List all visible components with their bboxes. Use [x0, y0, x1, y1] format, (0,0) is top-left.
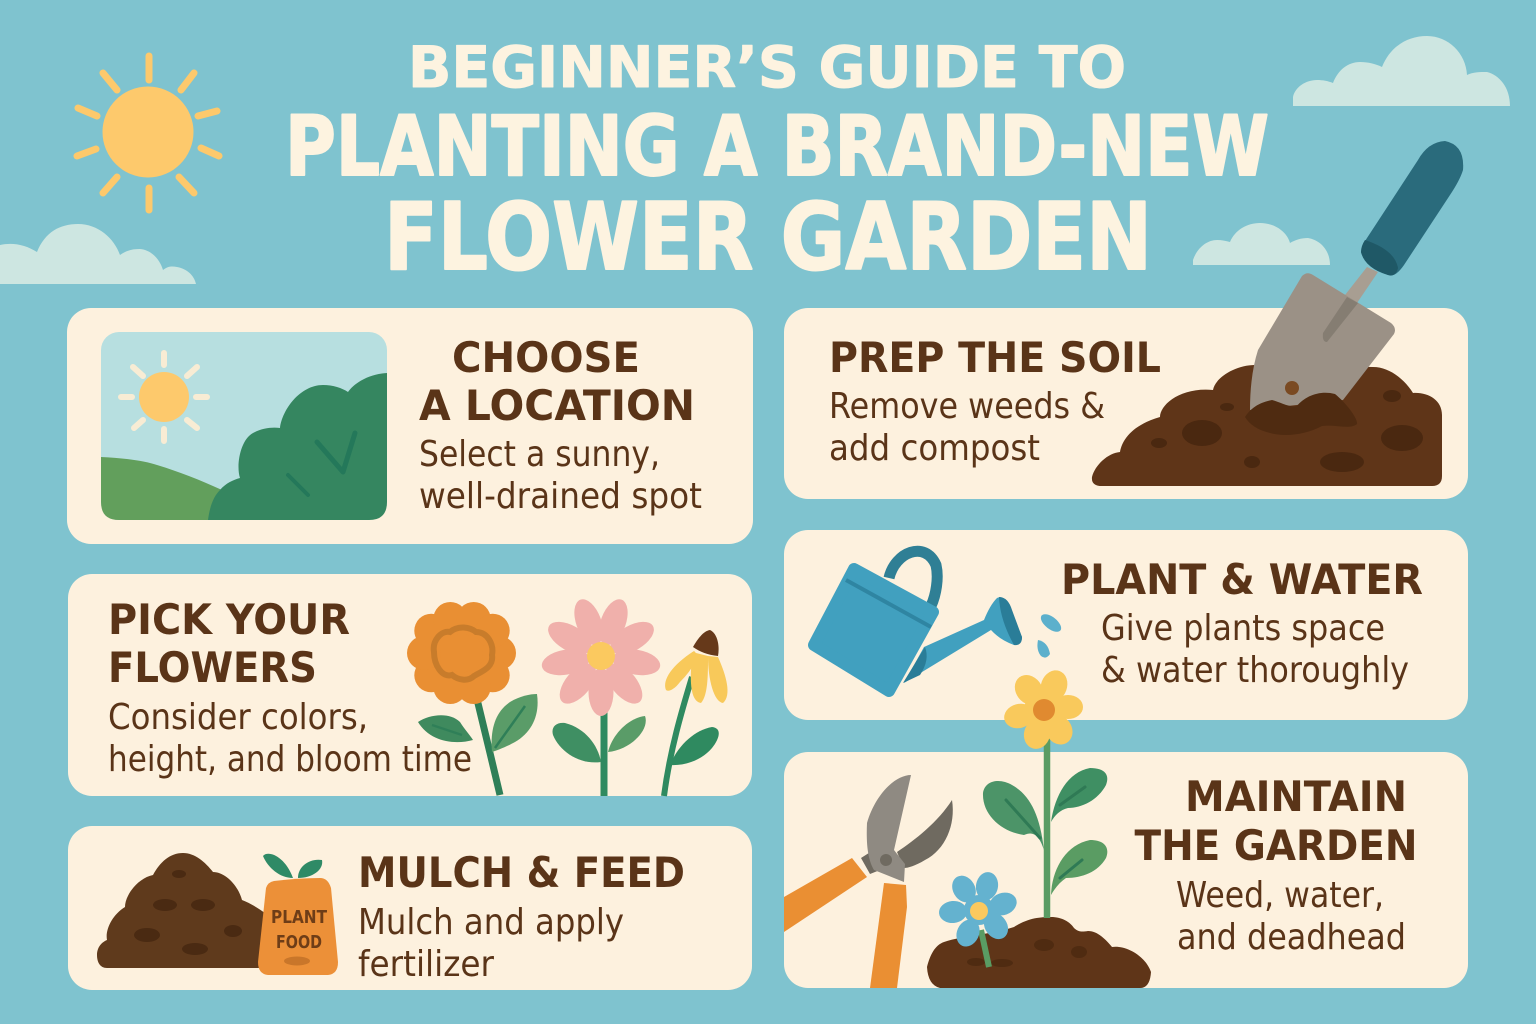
illustration: plant food bag: PLANT: [271, 907, 328, 928]
panel: pick your flowers: [68, 574, 752, 796]
title: BEGINNER’S GUIDE TO: [408, 35, 1126, 101]
text: Remove weeds &: [829, 386, 1105, 427]
title: PLANTING A BRAND-NEW: [285, 98, 1269, 195]
text: [829, 386, 1105, 469]
icon: cloud top right: [1293, 36, 1510, 106]
text: [1101, 608, 1409, 691]
illustration: soil pile: [1092, 365, 1442, 486]
text: [358, 902, 624, 985]
text: & water thoroughly: [1101, 650, 1409, 691]
text: add compost: [829, 428, 1040, 469]
heading: PREP THE SOIL: [829, 333, 1161, 382]
illustration: soil mound: [927, 917, 1151, 988]
text: [419, 434, 702, 517]
text: Weed, water,: [1176, 875, 1384, 916]
heading: PLANT & WATER: [1061, 555, 1423, 604]
heading: THE GARDEN: [1134, 821, 1418, 870]
illustration: blue flower: [938, 870, 1020, 967]
illustration: coneflower: [664, 630, 727, 796]
illustration: plant food bag: FOOD: [276, 932, 322, 953]
title: FLOWER GARDEN: [384, 183, 1152, 291]
text: fertilizer: [358, 944, 494, 985]
panel: pick your flowers: FLOWERS: [108, 643, 317, 692]
text: [108, 697, 472, 780]
heading: CHOOSE: [452, 333, 640, 382]
text: Give plants space: [1101, 608, 1385, 649]
text: [1176, 875, 1406, 958]
icon: sun: [77, 56, 219, 210]
text: well-drained spot: [419, 476, 702, 517]
illustration: orange flower: [407, 602, 538, 795]
heading: MULCH & FEED: [358, 848, 685, 897]
heading: [1134, 772, 1418, 870]
heading: MAINTAIN: [1185, 772, 1407, 821]
icon: trowel: [1245, 141, 1463, 435]
text: Consider colors,: [108, 697, 368, 738]
illustration: pruning shears: [784, 775, 953, 988]
illustration: plant food bag: [258, 854, 338, 975]
panel: prep the soil: [784, 308, 1468, 499]
panel: mulch and feed: [68, 826, 752, 990]
illustration: sunny landscape: [101, 332, 387, 520]
title: [285, 35, 1269, 291]
icon: cloud mid right: [1193, 223, 1330, 265]
text: height, and bloom time: [108, 739, 472, 780]
panel: choose a location: [67, 308, 753, 544]
icon: cloud left: [0, 224, 196, 284]
illustration: pink flower: [540, 595, 662, 796]
text: and deadhead: [1177, 917, 1406, 958]
illustration: tall yellow flower: [983, 667, 1107, 918]
illustration: mulch pile: [97, 853, 265, 968]
heading: PICK YOUR: [108, 595, 350, 644]
text: Mulch and apply: [358, 902, 624, 943]
text: Select a sunny,: [419, 434, 660, 475]
panel: choose a location: A LOCATION: [419, 381, 695, 430]
illustration: watering can: [814, 551, 1064, 691]
panel: plant and water: [784, 530, 1468, 720]
panel: maintain the garden: [784, 752, 1468, 988]
